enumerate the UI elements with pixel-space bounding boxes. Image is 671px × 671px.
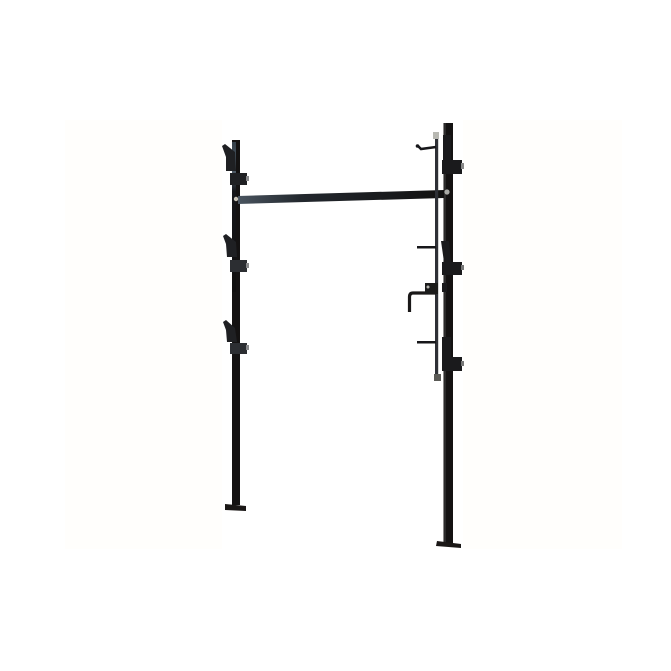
right crossbar bolt: [444, 189, 450, 195]
left crossbar bolt: [234, 197, 238, 201]
right upright post: [436, 123, 461, 548]
left post clamps: [222, 144, 249, 354]
background: faint off-white left panel: [65, 120, 222, 549]
small bracket on right post: [442, 283, 447, 292]
hook: top: [418, 146, 436, 149]
crank handle: [410, 293, 436, 312]
thin vertical rod with hooks: [410, 132, 441, 381]
clamp: right lower: [442, 337, 464, 371]
right post clamps: [441, 135, 464, 371]
clamp: left middle: [223, 234, 249, 272]
clamp: left upper: [222, 144, 249, 185]
hook: lower: [417, 341, 436, 344]
hook: middle: [417, 246, 436, 248]
clamp: right upper: [442, 135, 464, 174]
clamp: left lower: [223, 320, 249, 354]
crossbar: [238, 190, 444, 204]
left upright post: [225, 140, 246, 511]
background: faint off-white right panel: [463, 120, 622, 549]
clamp: right middle: [441, 241, 464, 275]
